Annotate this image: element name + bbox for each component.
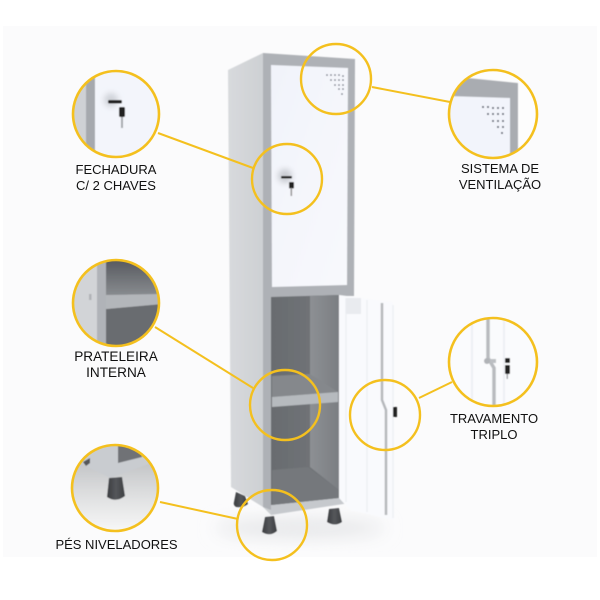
upper door vent holes xyxy=(326,74,344,95)
shelf top xyxy=(272,374,338,397)
shelf front xyxy=(272,392,338,407)
label: travamento: TRIPLO xyxy=(471,427,517,442)
label: prateleira: PRATELEIRA xyxy=(74,349,158,364)
label: fechadura: C/ 2 CHAVES xyxy=(76,178,156,193)
upper door lock xyxy=(278,169,294,196)
callout: ventilation detail xyxy=(448,68,540,160)
label: ventilação: SISTEMA DE xyxy=(461,161,539,176)
label: fechadura: FECHADURA xyxy=(76,162,156,177)
label: prateleira: INTERNA xyxy=(86,365,147,380)
front foot xyxy=(262,516,277,534)
side panel xyxy=(228,53,271,515)
callout: triple lock detail xyxy=(448,316,540,408)
locking rod xyxy=(382,303,386,515)
open lower door xyxy=(339,295,394,520)
front frame xyxy=(263,53,355,510)
lower door vent xyxy=(346,298,361,314)
interior opening xyxy=(271,295,339,505)
back left foot xyxy=(234,492,248,507)
callout: leveling foot detail xyxy=(70,444,160,532)
label: ventilação: VENTILAÇÃO xyxy=(459,177,541,192)
upper door xyxy=(271,65,348,287)
cabinet base xyxy=(271,497,350,515)
door inner edge xyxy=(346,298,393,518)
small marker circles on the locker xyxy=(237,44,420,560)
lower door lock xyxy=(393,407,397,417)
interior floor xyxy=(272,467,338,505)
label: travamento: TRAVAMENTO xyxy=(450,411,538,426)
floor shadow xyxy=(215,519,385,537)
callout: shelf detail xyxy=(72,259,162,349)
callout: lock detail xyxy=(70,68,162,160)
leader lines xyxy=(155,87,452,519)
interior right wall xyxy=(310,295,339,490)
label: pés niveladores: PÉS NIVELADORES xyxy=(55,537,178,552)
right foot xyxy=(327,508,342,524)
locker cabinet xyxy=(215,53,397,537)
